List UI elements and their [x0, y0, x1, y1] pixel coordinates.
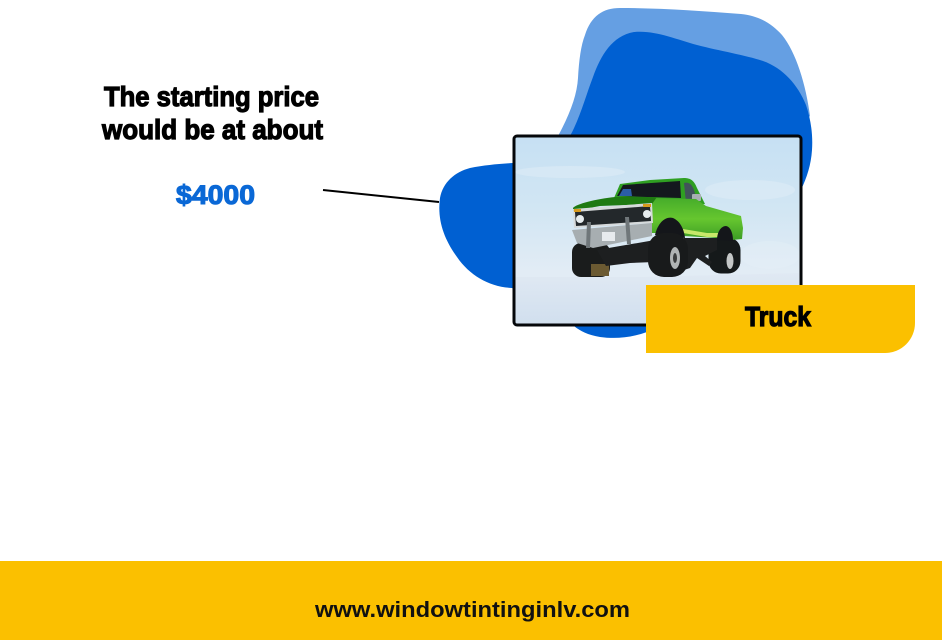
photo: green monster truck on snow — [514, 136, 801, 325]
price value: $4000 — [176, 180, 255, 210]
front wheel — [648, 233, 688, 277]
label box — [646, 285, 915, 353]
background blob: dark blue — [439, 32, 812, 338]
bull bar — [586, 217, 631, 248]
license plate — [602, 232, 615, 241]
windshield — [617, 181, 681, 198]
truck — [572, 178, 743, 277]
mirror — [692, 194, 701, 201]
headlight right — [643, 210, 651, 218]
photo sky — [514, 136, 801, 325]
hood — [573, 197, 657, 211]
footer url: www.windowtintinginlv.com — [314, 597, 630, 622]
background blob: light blue — [558, 8, 810, 145]
headlight left — [576, 215, 584, 223]
cab and roof — [614, 178, 705, 208]
rear suspension — [684, 238, 717, 270]
photo frame — [514, 136, 801, 325]
grille frame — [573, 203, 653, 228]
photo cloud streaks — [515, 166, 800, 269]
front wheel arch — [655, 218, 685, 238]
rear wheel arch — [717, 226, 733, 241]
chassis and suspension — [597, 240, 655, 266]
connector line — [323, 190, 439, 202]
heading: would be at about — [101, 114, 323, 145]
rear wheel — [709, 238, 740, 273]
windshield blue reflection — [619, 189, 632, 196]
body stripe — [683, 229, 718, 237]
far front wheel — [572, 243, 610, 277]
bumper — [572, 223, 652, 248]
grille openings — [575, 206, 651, 226]
side window — [684, 183, 696, 203]
label: Truck: Truck — [745, 301, 811, 332]
footer band — [0, 561, 942, 640]
snow ground — [515, 273, 799, 324]
heading: The starting price — [104, 81, 319, 112]
turn signals — [574, 209, 581, 212]
truck body side — [652, 198, 743, 240]
heading — [101, 81, 323, 145]
